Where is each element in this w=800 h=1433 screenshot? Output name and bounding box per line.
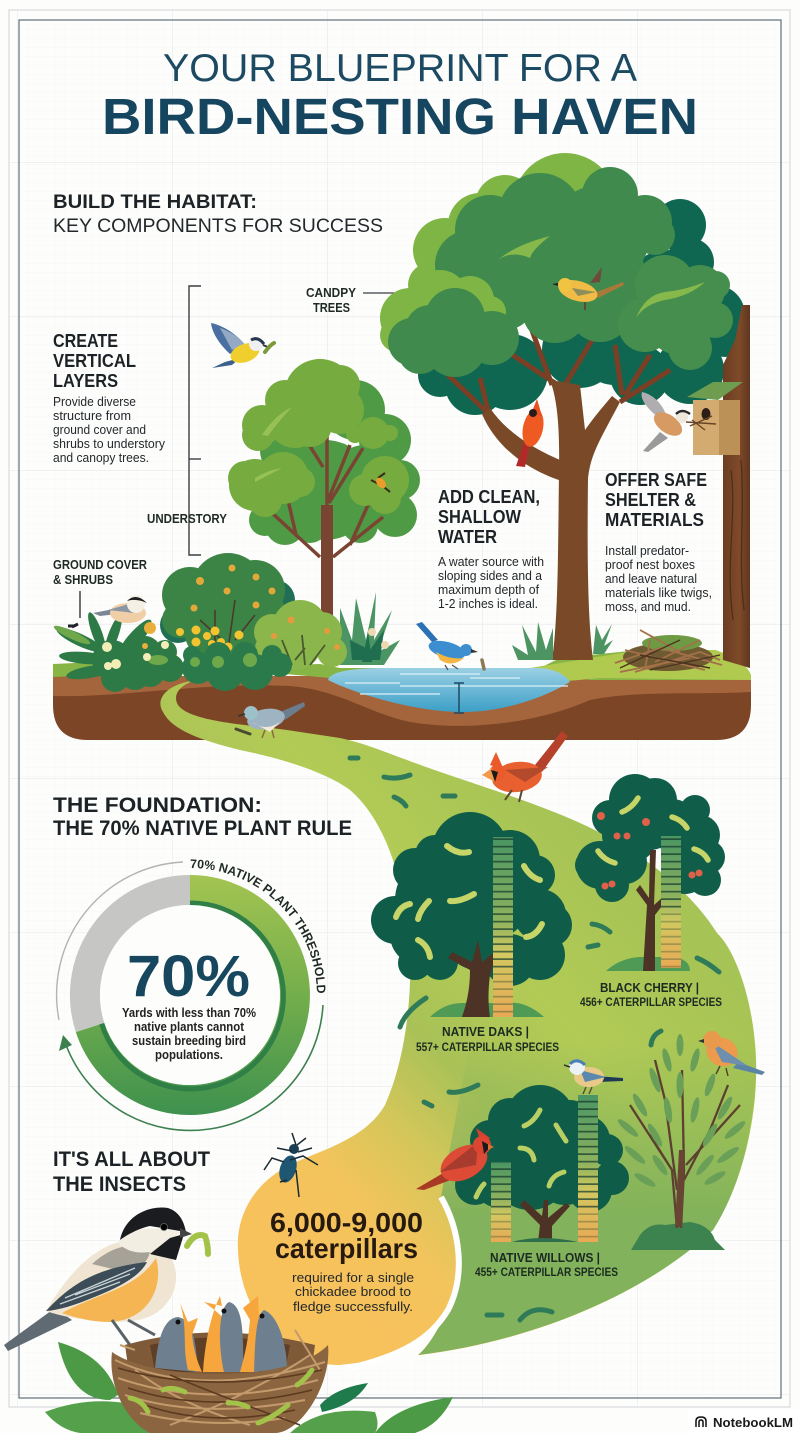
nest back <box>125 1332 315 1380</box>
text block: add clean shallow water: A water source with <box>438 554 544 569</box>
callout: caterpillar statistic: 6,000-9,000 <box>270 1207 423 1238</box>
spiky plant by pond <box>340 592 400 665</box>
icon: blue tit on tree <box>564 1059 623 1094</box>
willow caterpillars <box>476 1110 566 1197</box>
text block: offer safe shelter: MATERIALS <box>605 510 704 530</box>
heading: insects: IT'S ALL ABOUT <box>53 1148 210 1171</box>
heading: build the habitat <box>53 191 383 237</box>
text block: offer safe shelter: materials like twigs, <box>605 585 712 600</box>
dark caterpillars on path <box>350 758 719 1320</box>
canopy back foliage <box>408 153 617 307</box>
understory back foliage <box>249 380 420 545</box>
label: ground cover and shrubs <box>53 558 147 618</box>
center caption: native plants cannot <box>134 1019 245 1034</box>
tree labels: 455+ CATERPILLAR SPECIES <box>475 1265 618 1279</box>
shrub bush with yellow flowers <box>160 553 295 670</box>
label: canopy trees <box>306 285 396 315</box>
icon: grass tufts near tree <box>512 622 613 660</box>
heading: build the habitat: KEY COMPONENTS FOR SUCCESS <box>53 215 383 237</box>
callout: caterpillar statistic: chickadee brood to <box>295 1284 411 1299</box>
heading: build the habitat: BUILD THE HABITAT: <box>53 191 257 213</box>
logo: NotebookLM: NotebookLM <box>713 1416 793 1430</box>
canopy tree <box>380 153 747 660</box>
body <box>46 1240 176 1322</box>
nest caterpillars <box>130 1370 312 1423</box>
icon: nest box <box>687 382 743 455</box>
label: ground cover and shrubs: & SHRUBS <box>53 573 113 587</box>
text block: offer safe shelter <box>605 470 712 614</box>
heading: the foundation: THE 70% NATIVE PLANT RULE <box>53 817 352 840</box>
text block: create vertical layers: LAYERS <box>53 371 118 391</box>
left limb <box>482 408 565 482</box>
canopy left lobe <box>380 270 519 377</box>
understory branches <box>272 433 383 617</box>
icon: cardinal on branch <box>516 399 547 467</box>
cherry ground mound <box>606 957 690 971</box>
center value: 70% <box>127 944 250 1009</box>
oak caterpillar bar <box>493 837 513 1017</box>
text block: offer safe shelter: Install predator- <box>605 543 689 558</box>
text block: offer safe shelter: moss, and mud. <box>605 599 691 614</box>
oak trunk <box>448 940 497 1017</box>
icon: chickadee with caterpillar <box>4 1207 208 1351</box>
light green bush <box>254 600 347 670</box>
logo: NotebookLM <box>688 1410 800 1433</box>
willow shrub tree <box>616 1034 747 1250</box>
center caption: sustain breeding bird <box>132 1033 246 1048</box>
text block: add clean shallow water <box>438 487 544 611</box>
icon: flying sparrow at box <box>642 392 716 452</box>
text block: offer safe shelter: OFFER SAFE <box>605 470 707 490</box>
nest front <box>111 1345 328 1433</box>
icon: yellow bird in canopy <box>552 267 624 310</box>
text block: create vertical layers: ground cover and <box>53 422 146 437</box>
label: canopy trees: CANDPY <box>306 285 356 300</box>
text block: create vertical layers: shrubs to understory <box>53 436 165 451</box>
callout: caterpillar statistic <box>270 1207 423 1314</box>
cherry trunk <box>636 850 665 971</box>
tree labels: 456+ CATERPILLAR SPECIES <box>580 995 722 1009</box>
text block: offer safe shelter: SHELTER & <box>605 490 696 510</box>
icon: big cardinal on path <box>482 731 568 802</box>
bottom leaves <box>45 1342 453 1433</box>
callout: caterpillar statistic: fledge successfully. <box>293 1299 413 1314</box>
center caption <box>122 1005 256 1062</box>
text block: create vertical layers: CREATE <box>53 331 118 351</box>
icon: chickadee on ground cover <box>93 595 147 623</box>
text block: offer safe shelter: and leave natural <box>605 571 697 586</box>
ground cross-section with pond <box>53 650 751 740</box>
icon: bee on tree <box>371 473 390 492</box>
layer bracket <box>189 286 201 555</box>
icon: grey bird on path <box>236 702 305 738</box>
text block: add clean shallow water: SHALLOW <box>438 507 521 527</box>
understory light foliage <box>228 359 409 517</box>
text block: add clean shallow water: WATER <box>438 527 497 547</box>
outer thin arcs <box>57 862 183 1020</box>
heading: insects: THE INSECTS <box>53 1173 186 1196</box>
willow caterpillar bars <box>491 1095 598 1242</box>
icon: orange bird on willow <box>698 1031 765 1076</box>
oak ground mound <box>430 1003 544 1017</box>
curved label <box>190 868 317 995</box>
tree: black cherry <box>575 774 725 971</box>
tail <box>4 1308 72 1351</box>
donut chart: 70 percent <box>56 859 326 1132</box>
callout: caterpillar statistic: caterpillars <box>275 1233 418 1264</box>
canopy right lobe <box>618 255 733 370</box>
green 70 percent segment <box>90 890 295 1100</box>
donut chart: 70 percent: 70% NATIVE PLANT THRESHOLD <box>190 859 326 993</box>
willow tree foliage <box>455 1085 629 1212</box>
label: canopy trees: TREES <box>313 300 350 315</box>
tree labels: NATIVE DAKS | <box>442 1024 529 1039</box>
heading: the foundation: THE FOUNDATION: <box>53 794 262 817</box>
heading: the foundation <box>53 794 352 840</box>
cherry caterpillar bar <box>661 836 681 968</box>
front leafy plants <box>182 642 292 691</box>
text block: create vertical layers <box>53 331 165 465</box>
title: YOUR BLUEPRINT FOR A <box>163 47 637 90</box>
tree labels: 557+ CATERPILLAR SPECIES <box>416 1040 559 1054</box>
oak caterpillars <box>396 846 542 957</box>
tree labels <box>416 980 722 1279</box>
willow trunk <box>520 1200 570 1242</box>
heading: insects <box>53 1148 210 1196</box>
legs <box>112 1320 155 1345</box>
head <box>118 1228 182 1253</box>
icon: cardinal by willow tree <box>416 1128 494 1190</box>
winding green path and callout band <box>160 680 756 1372</box>
caterpillar in beak <box>187 1235 208 1254</box>
title: BIRD-NESTING HAVEN <box>102 88 698 145</box>
center caption: Yards with less than 70% <box>122 1005 256 1020</box>
canopy branches <box>448 325 670 415</box>
oak foliage <box>371 812 572 986</box>
text block: create vertical layers: VERTICAL <box>53 351 136 371</box>
back and wing <box>92 1245 150 1272</box>
chicks <box>155 1296 287 1372</box>
tree: native willows <box>455 1085 629 1242</box>
callout: caterpillar statistic: required for a single <box>292 1270 414 1285</box>
cherry foliage <box>575 774 725 902</box>
tree: native oaks <box>371 812 572 1017</box>
label: understory: UNDERSTORY <box>147 512 228 526</box>
icon: beetle <box>264 1133 318 1197</box>
text block: add clean shallow water: maximum depth of <box>438 582 539 597</box>
nest box post <box>723 305 750 668</box>
icon: insect on leaf <box>68 624 78 627</box>
icon: blue bird at pond <box>416 622 484 670</box>
canopy main foliage <box>435 167 675 343</box>
pond <box>328 668 570 713</box>
text block: add clean shallow water: ADD CLEAN, <box>438 487 540 507</box>
center caption: populations. <box>155 1047 223 1062</box>
trunk <box>550 380 620 660</box>
understory tree <box>228 359 420 617</box>
icon: nest with chicks <box>111 1296 328 1433</box>
grey remainder segment <box>85 890 190 1028</box>
title <box>102 47 698 145</box>
tree labels: BLACK CHERRY | <box>600 980 699 995</box>
text block: add clean shallow water: 1-2 inches is ideal. <box>438 596 538 611</box>
icon: twig nest material <box>615 630 722 672</box>
text block: create vertical layers: and canopy trees. <box>53 450 149 465</box>
text block: create vertical layers: Provide diverse <box>53 394 136 409</box>
text block: offer safe shelter: proof nest boxes <box>605 557 695 572</box>
icon: flying blue tit <box>211 323 274 368</box>
cherries and caterpillars <box>597 798 708 890</box>
label: ground cover and shrubs: GROUND COVER <box>53 558 147 572</box>
ground cover plants <box>52 611 184 692</box>
text block: create vertical layers: structure from <box>53 408 131 423</box>
text block: add clean shallow water: sloping sides and a <box>438 568 543 583</box>
tree labels: NATIVE WILLOWS | <box>490 1250 600 1265</box>
